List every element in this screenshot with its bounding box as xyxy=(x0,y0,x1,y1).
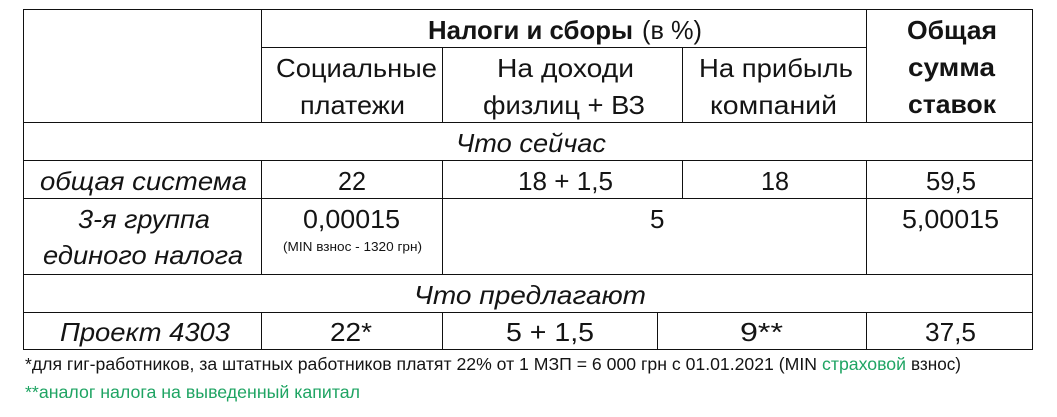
row: project 4303 xyxy=(60,317,976,347)
row: project 4303: Проект 4303 xyxy=(60,317,231,347)
footnote: gig workers: *для гиг-работников, за штатных работников платят 22% от 1 МЗП = 6 000 грн с 01.01.2021 (MIN xyxy=(25,354,817,374)
footnote: gig workers: страховой xyxy=(822,354,906,374)
row: third group of single tax: 5 xyxy=(650,204,664,234)
footnote: gig workers: взнос) xyxy=(911,354,961,374)
footnote: withdrawn capital tax analogue: **аналог налога на выведенный капитал xyxy=(25,382,360,402)
heading: taxes and fees: Налоги и сборы xyxy=(428,15,633,45)
row: third group of single tax: 5,00015 xyxy=(902,204,999,234)
row: third group of single tax: 3-я группа xyxy=(78,204,210,234)
row: third group of single tax: (MIN взнос - 1320 грн) xyxy=(283,239,422,254)
column header: personal income tax: На доходи xyxy=(497,53,634,83)
row: general system: 59,5 xyxy=(926,166,976,196)
row: project 4303: 5 + 1,5 xyxy=(506,317,594,347)
column header: corporate profit tax xyxy=(699,53,853,120)
heading: taxes and fees: (в %) xyxy=(642,15,702,45)
table header xyxy=(276,15,997,120)
column header: social payments: платежи xyxy=(300,90,405,120)
column header: total rate: Общая xyxy=(907,15,997,45)
row: general system: 18 + 1,5 xyxy=(518,166,613,196)
row: third group of single tax: 0,00015 xyxy=(303,204,400,234)
row: general system: 18 xyxy=(761,166,789,196)
row: third group of single tax xyxy=(43,204,999,270)
section heading: current state: Что сейчас xyxy=(456,128,606,158)
row: general system: 22 xyxy=(338,166,366,196)
column header: social payments: Социальные xyxy=(276,53,437,83)
row: project 4303: 9** xyxy=(740,317,783,347)
column header: total rate: ставок xyxy=(908,89,997,119)
column header: personal income tax: физлиц + ВЗ xyxy=(483,90,645,120)
column header: total rate: сумма xyxy=(908,52,996,82)
column header: social payments xyxy=(276,53,437,120)
row: general system: общая система xyxy=(40,166,247,196)
column header: personal income tax xyxy=(483,53,645,120)
row: project 4303: 37,5 xyxy=(925,317,976,347)
row: third group of single tax: единого налога xyxy=(43,240,243,270)
column header: total rate xyxy=(907,15,997,119)
row: general system xyxy=(40,166,976,196)
row: project 4303: 22* xyxy=(330,317,372,347)
column header: corporate profit tax: компаний xyxy=(710,90,837,120)
column header: corporate profit tax: На прибыль xyxy=(699,53,853,83)
section heading: what is proposed: Что предлагают xyxy=(414,280,646,310)
